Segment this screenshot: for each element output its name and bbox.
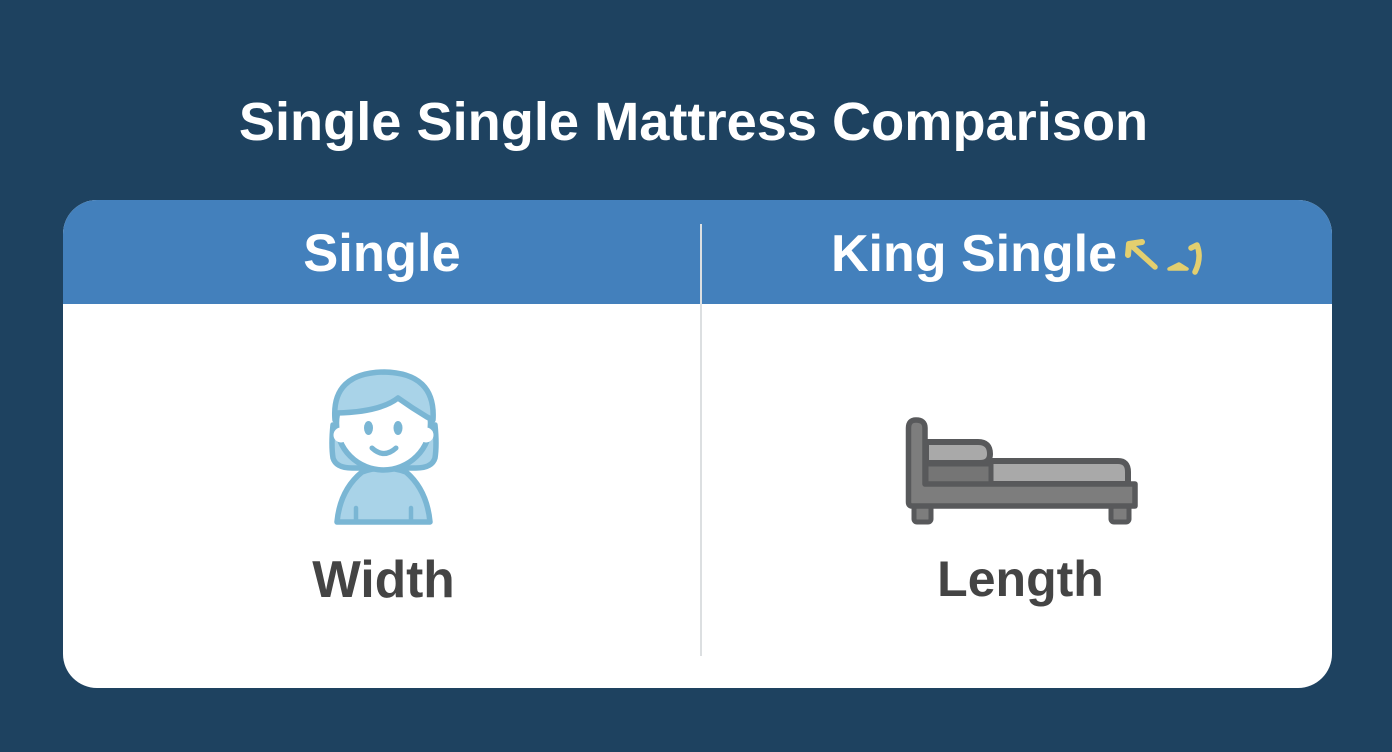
smile <box>372 448 396 454</box>
frame <box>908 420 1135 506</box>
mattress <box>985 461 1128 484</box>
upper pillow <box>926 442 990 463</box>
icon: child <box>329 369 439 525</box>
title: Single Single Mattress Comparison <box>239 92 1148 152</box>
bed legs <box>914 506 931 522</box>
heading: King Single: King Single <box>831 225 1117 283</box>
lower pillow <box>926 464 991 484</box>
heading: Single: Single <box>303 224 461 283</box>
label: Width: Width <box>312 550 455 608</box>
label: Length: Length <box>937 551 1104 607</box>
icon: yellow arrows <box>1125 239 1202 275</box>
icon: bed <box>906 417 1138 524</box>
eyes <box>364 421 373 435</box>
face <box>336 376 430 470</box>
body <box>337 468 430 522</box>
column divider <box>700 224 702 656</box>
panel header band <box>63 200 1332 304</box>
ears <box>334 428 348 442</box>
hair back <box>332 425 436 468</box>
panel: comparison card <box>63 200 1332 688</box>
hair top <box>335 372 433 420</box>
